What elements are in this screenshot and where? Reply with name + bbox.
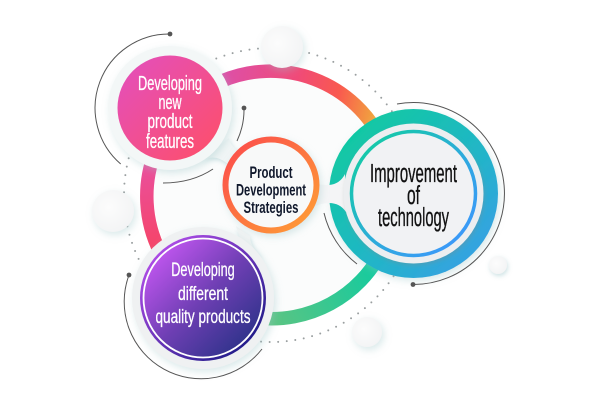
panel: centre product development strategies [226,140,316,230]
decorative ball: right [489,256,507,274]
label: developing different quality products: different [178,284,229,305]
label: developing new product features: features [146,131,194,153]
ring segment: left pink [147,152,160,252]
label: improvement of technology: of [407,182,421,210]
panel: developing new product features [95,32,246,183]
teal outer ring [329,109,498,278]
label: developing new product features: product [148,111,193,133]
orbit arc: teal outer [397,103,504,285]
panel: developing different quality products [124,226,274,379]
ring segment: top pink to orange [222,71,382,141]
main ring segments [147,71,382,319]
ring segment: bottom green [258,251,382,319]
pink disc [118,56,222,160]
dotted orbit [124,48,418,342]
dot: teal bottom [411,282,415,287]
label: improvement of technology: technology [378,204,449,232]
purple disc [144,238,262,358]
orbit arc: pink left [95,34,170,164]
label: product development strategies: Strategies [244,199,298,217]
label: developing new product features: new [158,92,182,114]
decorative ball: left [92,190,134,232]
dot: purple [127,273,131,277]
halo: teal inner [344,124,484,264]
decorative ball: bottom [352,317,382,347]
orbit arc: pink bottom [163,169,213,183]
connector neck: pink to centre [200,138,240,164]
label: developing new product features: Developing [138,73,202,95]
orbit arc: teal inner left [324,213,357,264]
panel: improvement of technology [312,103,504,287]
label: developing different quality products: quality products [156,307,250,328]
label: product development strategies [236,164,306,217]
label: improvement of technology: Improvement [370,160,457,188]
decorative ball: top [261,26,303,68]
orbit arc: purple [124,275,262,379]
label: developing different quality products [156,260,250,328]
dot: pink top [168,32,172,36]
connector neck: purple to centre [236,226,260,270]
label: developing new product features [138,73,202,153]
halo: pink circle [108,46,232,170]
halo: purple circle [132,227,274,369]
orbit arc: pink right [237,108,244,141]
label: product development strategies: Development [236,182,306,200]
label: improvement of technology [370,160,457,232]
inner ring background [154,78,388,312]
blue ring [352,132,476,256]
centre ring [226,140,316,230]
connector neck: teal to centre [312,174,346,212]
dot: pink right [242,106,246,110]
label: product development strategies: Product [250,164,293,182]
label: developing different quality products: Developing [171,260,235,281]
purple rim [140,235,266,361]
